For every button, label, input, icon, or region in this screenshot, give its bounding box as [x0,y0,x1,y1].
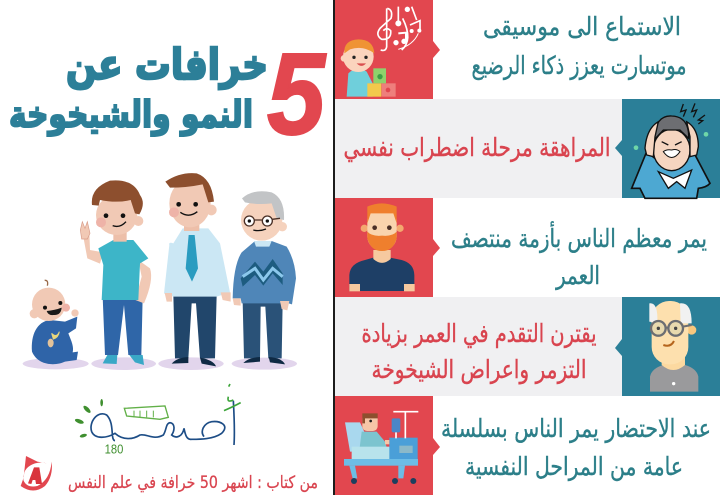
panel: myth 3 [335,198,707,297]
logo: Osboha 180: 180 [105,443,123,457]
adult with tie [164,173,231,366]
title number 5: 5 [267,29,326,159]
myth 4 icon panel [615,297,720,396]
illustration: four ages [23,173,297,370]
grandfather [233,191,296,364]
myth 4 text [362,319,597,385]
myth 5 icon panel [335,396,440,495]
panel: left title and illustration [9,29,326,493]
title line 1: خرافات عن [66,40,268,90]
teen [80,180,151,365]
myth 2 icon panel [615,99,720,198]
title line 2: النمو والشيخوخة [9,93,253,136]
myth 3 icon panel [335,198,440,297]
panel: myth 1 [335,0,686,99]
source line: من كتاب : اشهر 50 خرافة في علم النفس [68,473,318,493]
myth 4 text: يقترن التقدم في العمر بزيادة [362,319,597,348]
myth 4 text: التزمر واعراض الشيخوخة [372,355,586,385]
baby [30,280,79,364]
panel: myth 5 [335,396,711,495]
myth 1 text [472,12,686,81]
panel: myth 2 [335,99,720,198]
myth 1 text: الاستماع الى موسيقى [483,12,681,41]
myth 1 icon panel [335,0,440,99]
myth 2 text: المراهقة مرحلة اضطراب نفسي [344,133,610,162]
myth 5 text [441,414,711,481]
panel: myth 4 [335,297,720,396]
logo: Osboha 180 [74,384,241,457]
logo: red publisher mark [21,456,52,490]
myth 3 text: العمر [554,261,600,290]
myth 3 text [451,220,707,290]
